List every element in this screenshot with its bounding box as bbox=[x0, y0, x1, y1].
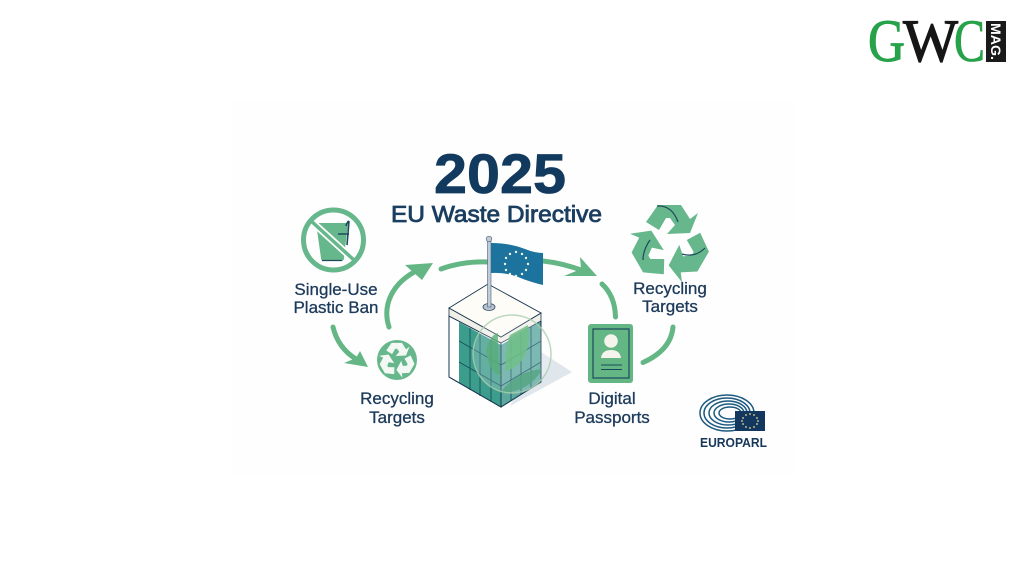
label: single-use plastic ban: Plastic Ban bbox=[293, 298, 379, 317]
logo W: W bbox=[903, 8, 958, 74]
building with flag bbox=[449, 236, 572, 407]
prohibition slash gap bbox=[310, 220, 355, 261]
hemicycle arcs bbox=[700, 395, 754, 431]
icon: no single-use plastic bbox=[304, 210, 364, 270]
passport cover bbox=[588, 324, 633, 383]
passport inner border bbox=[593, 329, 629, 378]
translucent globe bbox=[473, 315, 551, 393]
glass right bbox=[501, 321, 541, 407]
label: digital passports: Passports bbox=[574, 408, 650, 427]
recycling accent lines bbox=[643, 206, 705, 260]
passport lines bbox=[601, 365, 622, 370]
label: single-use plastic ban: Single-Use bbox=[294, 280, 378, 299]
person body bbox=[601, 350, 621, 358]
title: 2025: 2025 bbox=[434, 142, 566, 205]
person head bbox=[604, 334, 618, 348]
straw bbox=[338, 221, 349, 245]
EU flag bbox=[491, 243, 543, 285]
arrow head 3 bbox=[344, 351, 368, 367]
label: digital passports: Digital bbox=[588, 389, 636, 408]
logo: europarl bbox=[700, 395, 767, 450]
europarl stars bbox=[741, 413, 759, 429]
leaf bottom bbox=[500, 369, 542, 393]
leaf left bbox=[486, 333, 501, 376]
logo MAG text: MAG. bbox=[988, 23, 1004, 60]
roof top bbox=[449, 284, 541, 337]
cup bbox=[316, 223, 348, 261]
pole finial bbox=[486, 236, 492, 242]
shadow bbox=[510, 352, 572, 406]
subtitle: EU Waste Directive bbox=[391, 201, 602, 227]
left wall bbox=[449, 316, 501, 407]
flag base bbox=[483, 304, 495, 310]
arc: to passports bbox=[602, 284, 616, 317]
label: recycling targets right: Recycling bbox=[633, 279, 707, 298]
roof slab bbox=[449, 308, 541, 343]
logo C: C bbox=[954, 8, 985, 74]
leaf right bbox=[506, 325, 529, 372]
prohibition ring bbox=[304, 210, 364, 270]
flag stars bbox=[504, 251, 529, 277]
window grid bbox=[459, 327, 541, 402]
flag pole bbox=[488, 240, 491, 307]
icon: large recycling bbox=[623, 205, 715, 286]
icon: small recycling bbox=[376, 340, 417, 380]
arrow head 2 bbox=[564, 257, 597, 276]
arrow: ban to targets bbox=[333, 327, 356, 359]
cup base line bbox=[322, 260, 342, 262]
arrow head 1 bbox=[405, 263, 433, 280]
logo MAG box bbox=[986, 21, 1006, 62]
label: recycling targets right: Targets bbox=[642, 297, 698, 316]
small recycling arrows bbox=[376, 343, 417, 379]
label: recycling targets left: Recycling bbox=[360, 389, 434, 408]
arrow: to flag bbox=[441, 262, 488, 269]
icon: digital passport bbox=[588, 324, 633, 383]
label: recycling targets left: Targets bbox=[369, 408, 425, 427]
glass left bbox=[459, 322, 501, 407]
small recycling disc bbox=[377, 340, 417, 380]
logo G: G bbox=[868, 8, 905, 74]
europarl text: EUROPARL bbox=[700, 436, 767, 450]
arrow: from flag bbox=[543, 261, 584, 271]
arc: from passports bbox=[643, 327, 673, 362]
europarl flag bbox=[735, 411, 765, 431]
logo: GWC MAG bbox=[868, 8, 1006, 74]
outline bbox=[449, 321, 541, 407]
leaf emblem bbox=[486, 325, 542, 393]
arrows: cycle bbox=[333, 257, 673, 367]
arrow: targets to ban bbox=[387, 270, 418, 327]
